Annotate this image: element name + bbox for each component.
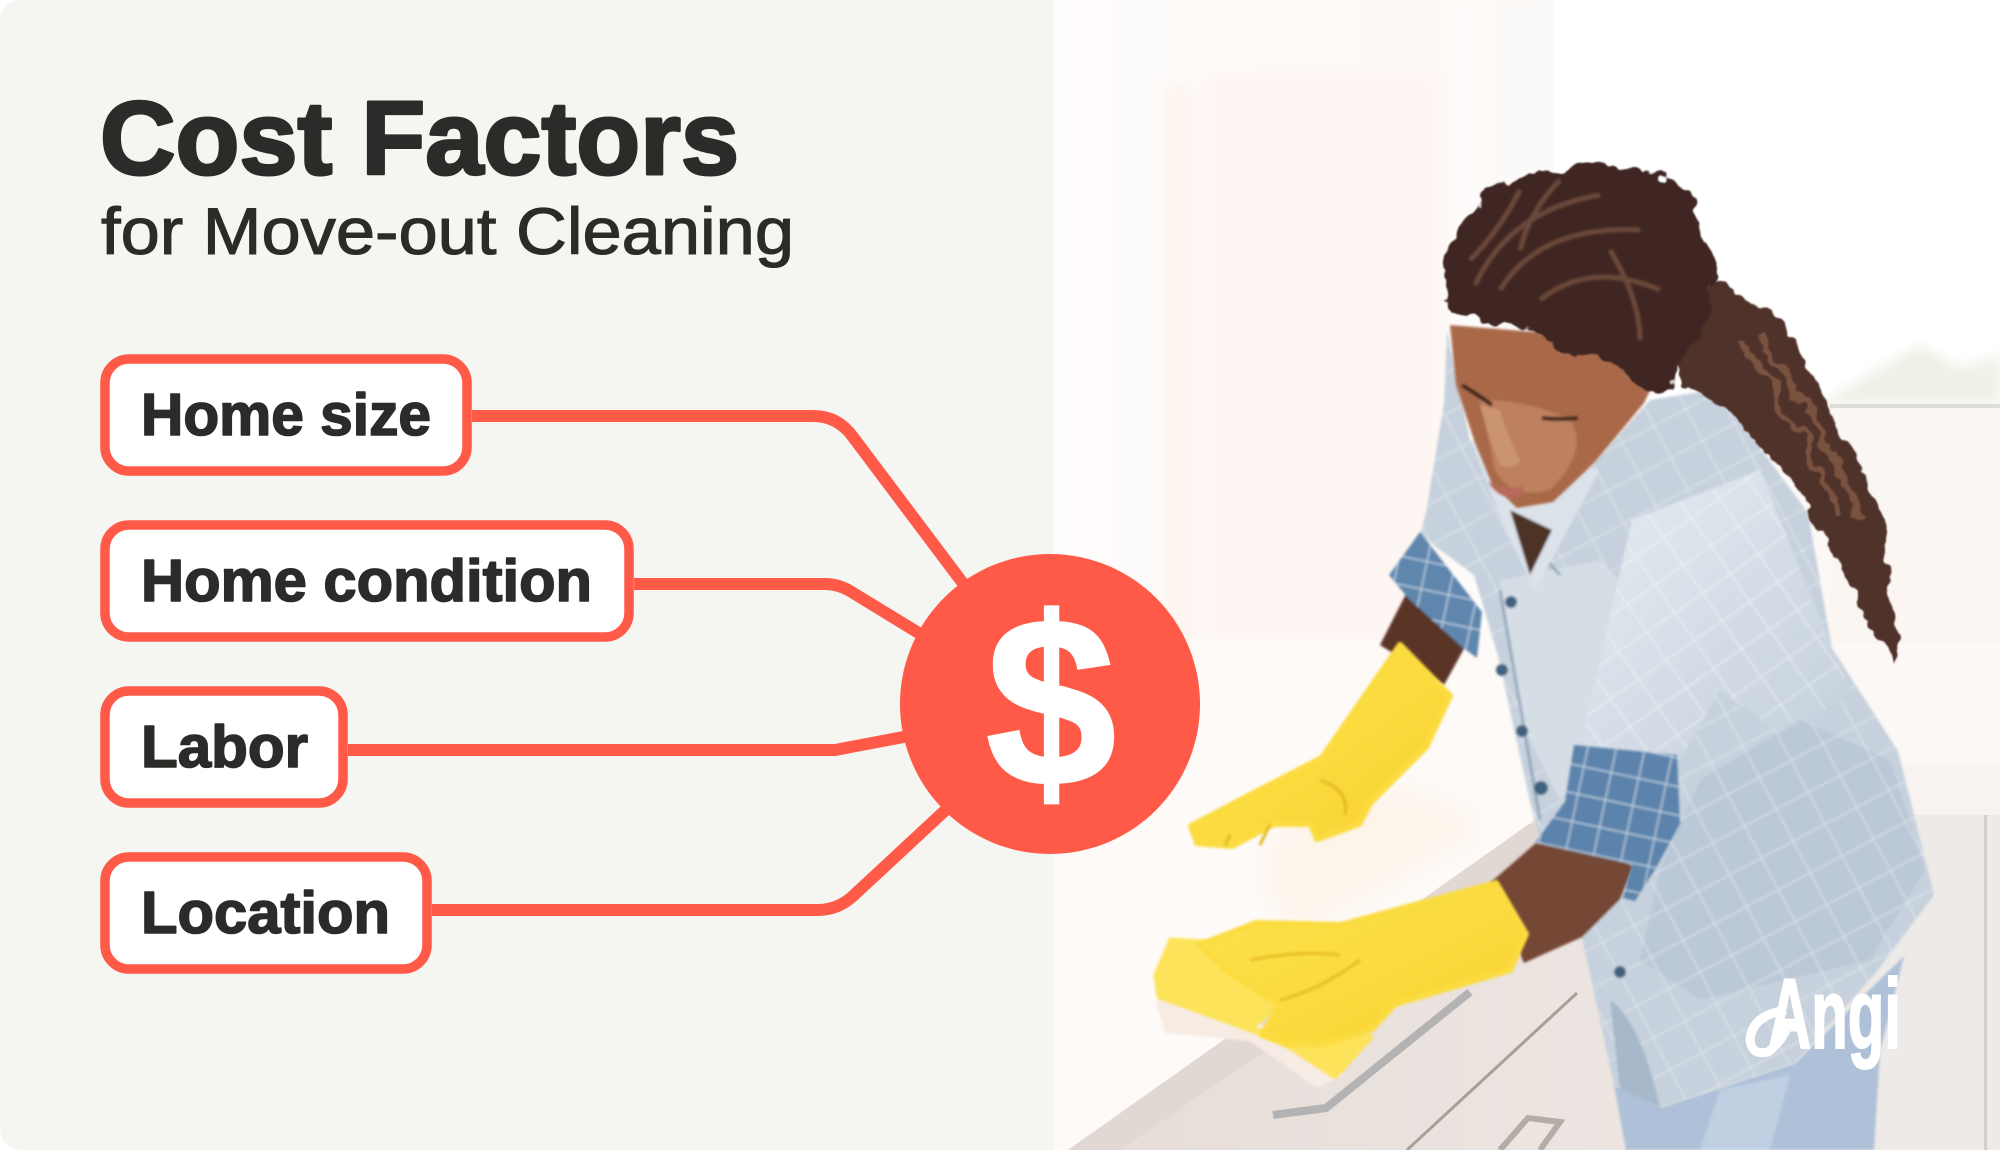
ponytail <box>1680 280 1892 660</box>
left panel background <box>0 0 1054 1150</box>
wall panelling <box>1170 90 1189 634</box>
factor: Home size <box>105 359 467 471</box>
connector lines <box>348 416 965 910</box>
title: Cost Factors <box>100 81 739 197</box>
shirt <box>1420 330 1934 1107</box>
subtitle: for Move-out Cleaning <box>101 194 794 268</box>
countertop <box>1274 798 1454 918</box>
photo: woman in yellow gloves wiping a kitchen counter <box>1054 0 2000 1150</box>
factor: Location: Location <box>141 880 390 946</box>
jeans <box>1614 956 1904 1150</box>
icon: dollar circle <box>900 554 1200 854</box>
factor: Location <box>105 857 427 969</box>
yellow glove: lower hand <box>1200 883 1526 1044</box>
cabinets and drawers <box>1068 815 2000 1150</box>
logo: Angi <box>1746 975 1898 1070</box>
face <box>1450 325 1660 508</box>
factor: Labor <box>105 691 343 803</box>
lower rolled sleeve cuff <box>1535 745 1680 901</box>
logo: Angi: Angi <box>1768 958 1901 1069</box>
lower arm <box>1490 835 1633 963</box>
sponge and cloth <box>1156 940 1371 1088</box>
upper arm and rolled sleeve cuff <box>1380 532 1482 685</box>
factor: Home size: Home size <box>141 382 431 448</box>
icon: dollar circle: $ <box>986 568 1116 836</box>
yellow glove: upper hand <box>1191 645 1450 846</box>
factor: Home condition <box>105 525 629 637</box>
factor: Labor: Labor <box>141 714 308 780</box>
hair <box>1440 163 1714 395</box>
factor: Home condition: Home condition <box>141 548 592 614</box>
window <box>1553 0 2000 408</box>
